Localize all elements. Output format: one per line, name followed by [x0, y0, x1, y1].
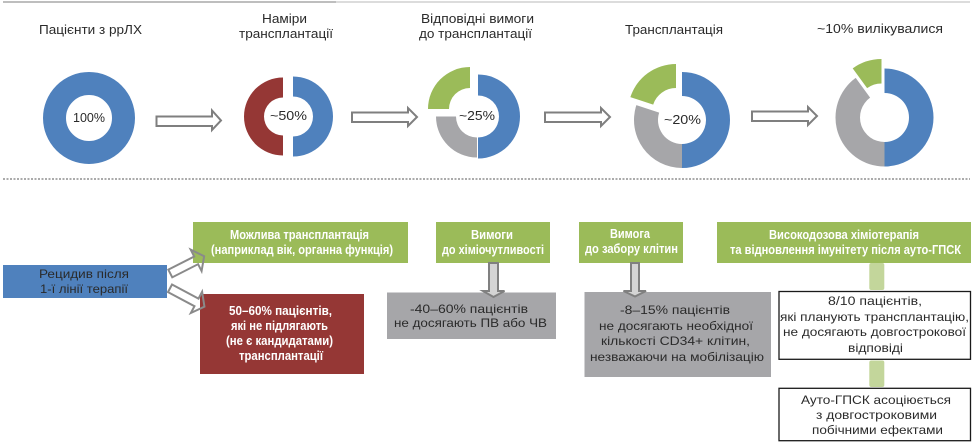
box: not transplant candidates: 50–60% пацієнтів, — [229, 304, 332, 318]
arrow: down to chemosensitivity result — [483, 263, 504, 297]
box: chemosensitivity requirement — [436, 222, 550, 263]
box: transplant possible — [193, 222, 408, 263]
donut: 50% — [244, 76, 333, 156]
box: high-dose chemotherapy: Високодозова хіміотерапія — [769, 228, 919, 242]
box: 40-60 percent no response: не досягають ПВ або ЧВ — [394, 316, 547, 330]
heading: transplant intent — [239, 11, 333, 41]
box: relapse after first-line therapy: 1-ї лінії терапії — [40, 282, 129, 296]
arrow: step 1 to 2 — [156, 110, 221, 130]
box: 8-15 percent insufficient CD34 cells: -8–15% пацієнтів — [620, 303, 730, 317]
box: auto-HSCT side effects: побічними ефектами — [812, 423, 943, 437]
arrow: step 3 to 4 — [545, 108, 610, 126]
box: relapse after first-line therapy: Рецидив після — [39, 267, 129, 281]
box: 40-60 percent no response: -40–60% пацієнтів — [410, 302, 528, 316]
donut: 25% — [428, 67, 520, 158]
donut: 100% — [54, 84, 124, 152]
box: 40-60 percent no response — [387, 292, 556, 339]
box: not transplant candidates — [200, 294, 364, 374]
box: cell collection requirement: Вимога — [610, 227, 651, 241]
box: chemosensitivity requirement: до хіміочутливості — [442, 243, 544, 257]
arrow: relapse to transplant possible — [165, 246, 210, 284]
donut: 10% — [836, 59, 933, 166]
box: transplant possible: (наприклад вік, органна функція) — [211, 243, 393, 257]
heading: transplant intent: Наміри — [262, 11, 307, 26]
donut: 20%: ~20% — [664, 112, 701, 127]
box: 8-15 percent insufficient CD34 cells: не досягають необхідної — [599, 319, 754, 333]
heading: transplantation: Трансплантація — [625, 22, 723, 37]
box: transplant possible: Можлива трансплантація — [230, 228, 369, 242]
heading: patients with rrHL: Пацієнти з ррЛХ — [39, 22, 142, 37]
box: 8-15 percent insufficient CD34 cells — [584, 292, 771, 377]
box: not transplant candidates: трансплантації — [239, 349, 323, 363]
box: high-dose chemotherapy — [717, 222, 971, 263]
box: cell collection requirement: до забору клітин — [585, 242, 678, 256]
box: not transplant candidates: (не є кандидатами) — [226, 334, 333, 348]
box: auto-HSCT side effects: з довгостроковими — [816, 408, 937, 422]
heading: transplant requirements — [419, 11, 534, 41]
arrow: step 2 to 3 — [352, 108, 417, 126]
heading: transplant requirements: до трансплантації — [419, 26, 532, 41]
box: 8 of 10 patients: які планують трансплантацію, — [780, 310, 969, 324]
heading: transplant requirements: Відповідні вимоги — [421, 11, 534, 26]
donut: 50%: ~50% — [270, 108, 307, 123]
arrow: step 4 to 5 — [752, 107, 817, 125]
arrow: relapse to not eligible — [164, 278, 210, 317]
connector: outcome to side effects — [869, 360, 884, 387]
box: not transplant candidates: які не підлягають — [231, 319, 328, 333]
box: 8 of 10 patients: не досягають довгострокової — [783, 325, 967, 339]
box: 8 of 10 patients: відповіді — [848, 341, 903, 355]
box: relapse after first-line therapy — [3, 265, 167, 298]
box: auto-HSCT side effects: Ауто-ГПСК асоціюється — [801, 393, 951, 407]
heading: transplant intent: трансплантації — [239, 26, 333, 41]
arrow: down to cell collection result — [624, 263, 646, 296]
connector: chemotherapy to outcome — [869, 263, 884, 290]
box: 8 of 10 patients — [779, 292, 970, 359]
heading: 10 percent cured: ~10% вилікувалися — [817, 21, 943, 36]
box: 8-15 percent insufficient CD34 cells: кількості CD34+ клітин, — [601, 334, 750, 348]
box: chemosensitivity requirement: Вимоги — [471, 228, 513, 242]
box: auto-HSCT side effects — [779, 388, 970, 441]
box: cell collection requirement — [579, 222, 683, 263]
donut: 100%: 100% — [73, 110, 105, 125]
donut: 20% — [630, 64, 730, 168]
box: 8 of 10 patients: 8/10 пацієнтів, — [828, 294, 922, 308]
box: 8-15 percent insufficient CD34 cells: незважаючи на мобілізацію — [590, 350, 764, 364]
donut: 25%: ~25% — [459, 108, 495, 123]
